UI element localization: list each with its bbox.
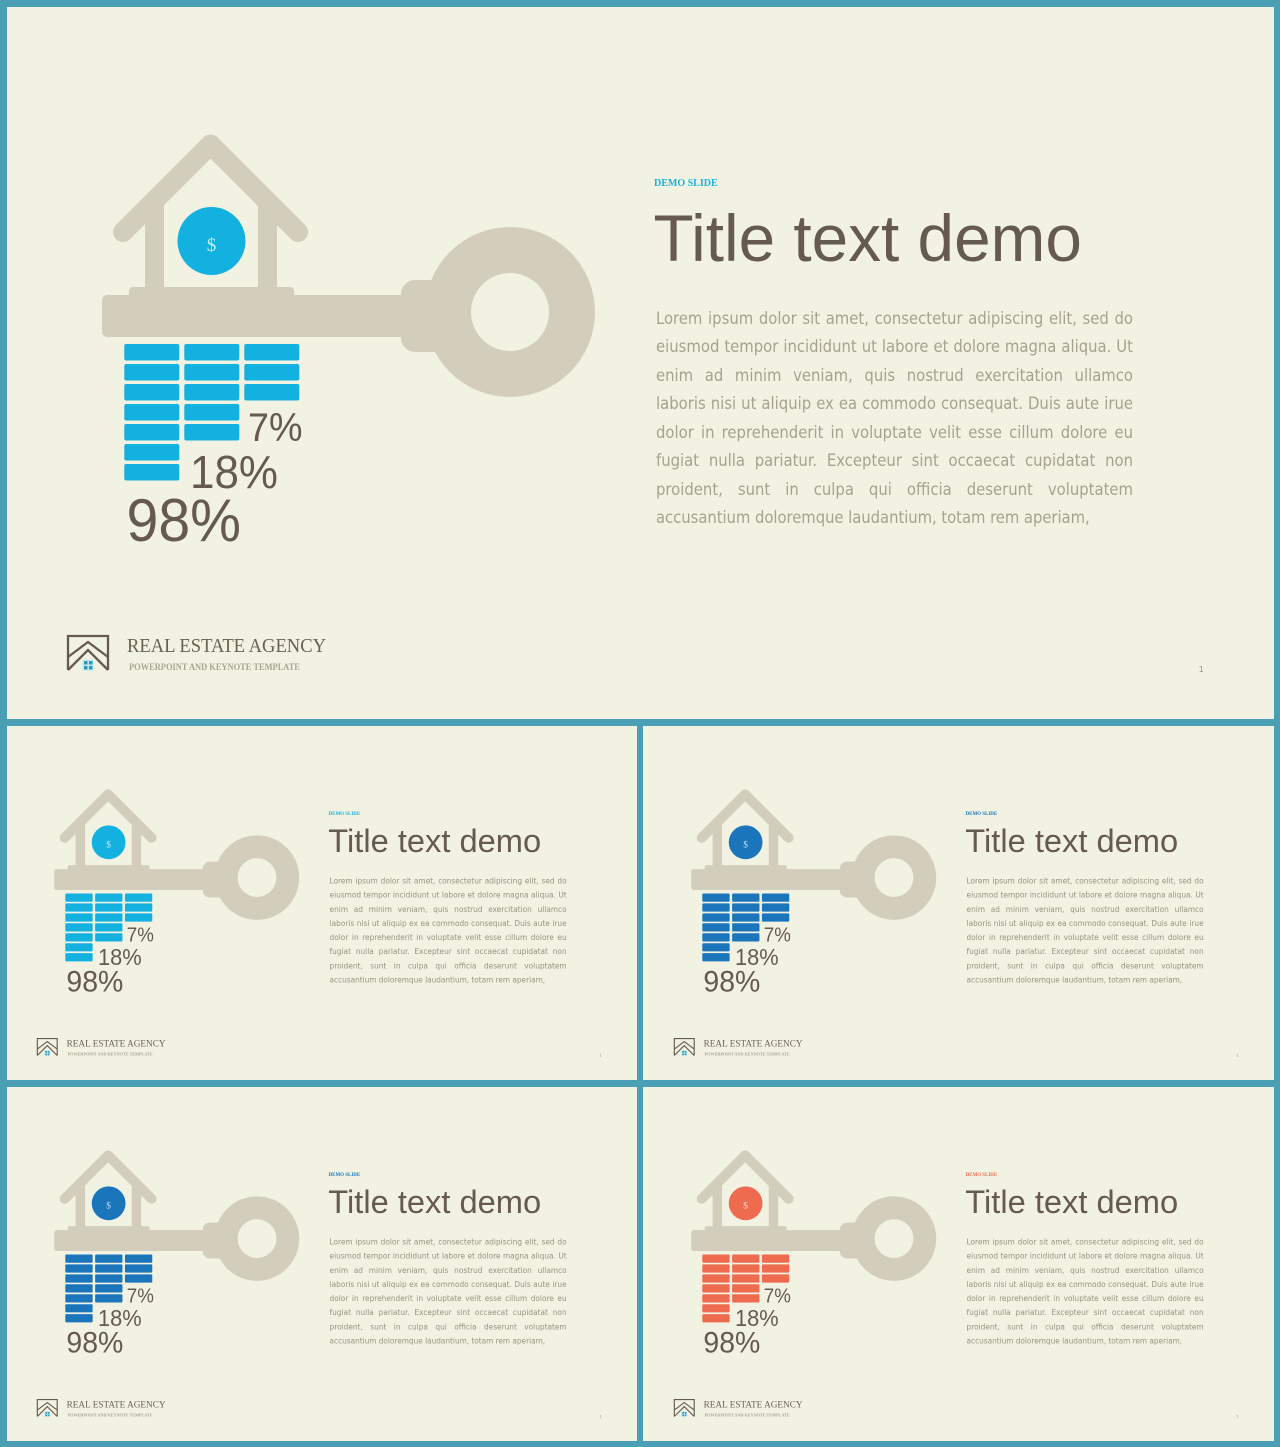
brand subtitle: POWERPOINT AND KEYNOTE TEMPLATE bbox=[68, 1052, 153, 1057]
body text: dolor in reprehenderit in voluptate velit esse cillum dolore eu bbox=[966, 933, 1203, 942]
body text: enim ad minim veniam, quis nostrud exercitation ullamco bbox=[330, 1265, 567, 1275]
body text: accusantium doloremque laudantium, totam rem aperiam, bbox=[330, 975, 545, 984]
label: 18%: 18% bbox=[98, 944, 142, 970]
label: 18%: 18% bbox=[734, 1305, 778, 1331]
label: 98%: 98% bbox=[66, 1326, 123, 1359]
icon: key bbox=[102, 227, 595, 397]
icon: key bbox=[691, 1196, 936, 1281]
icon: dollar coin bbox=[92, 825, 126, 859]
body text: eiusmod tempor incididunt ut labore et dolore magna aliqua. Ut bbox=[656, 337, 1133, 356]
panel: small slide orange bbox=[643, 1087, 1274, 1441]
body text: Lorem ipsum dolor sit amet, consectetur adipiscing elit, sed do bbox=[656, 308, 1133, 328]
body text: Lorem ipsum dolor sit amet, consectetur adipiscing elit, sed do bbox=[330, 876, 567, 885]
body text: fugiat nulla pariatur. Excepteur sint occaecat cupidatat non bbox=[966, 1308, 1203, 1317]
icon: dollar coin bbox=[728, 1186, 762, 1220]
body text: eiusmod tempor incididunt ut labore et dolore magna aliqua. Ut bbox=[966, 890, 1203, 899]
brick bar chart bbox=[65, 893, 152, 961]
icon: agency logo bbox=[674, 1039, 694, 1056]
label: 18%: 18% bbox=[98, 1305, 142, 1331]
tag: demo slide: DEMO SLIDE bbox=[965, 812, 997, 817]
page number: 1 bbox=[1199, 665, 1204, 674]
body text: dolor in reprehenderit in voluptate velit esse cillum dolore eu bbox=[656, 422, 1133, 442]
brand subtitle: POWERPOINT AND KEYNOTE TEMPLATE bbox=[68, 1413, 153, 1418]
panel: small slide dark blue, top right bbox=[643, 726, 1274, 1080]
icon: dollar coin: $ bbox=[207, 235, 216, 256]
illustration and headings bbox=[36, 1150, 602, 1419]
brand subtitle: POWERPOINT AND KEYNOTE TEMPLATE bbox=[129, 663, 300, 673]
brand subtitle: POWERPOINT AND KEYNOTE TEMPLATE bbox=[704, 1413, 789, 1418]
body text: eiusmod tempor incididunt ut labore et dolore magna aliqua. Ut bbox=[966, 1251, 1203, 1260]
label: 18%: 18% bbox=[734, 944, 778, 970]
body text: enim ad minim veniam, quis nostrud exercitation ullamco bbox=[966, 1265, 1203, 1275]
page number: 1 bbox=[599, 1414, 602, 1419]
body text: laboris nisi ut aliquip ex ea commodo consequat. Duis aute irue bbox=[330, 1279, 567, 1289]
icon: agency logo bbox=[37, 1400, 57, 1417]
body text: laboris nisi ut aliquip ex ea commodo consequat. Duis aute irue bbox=[656, 394, 1133, 413]
body text: dolor in reprehenderit in voluptate velit esse cillum dolore eu bbox=[966, 1294, 1203, 1303]
icon: dollar coin bbox=[178, 207, 246, 275]
body text: dolor in reprehenderit in voluptate velit esse cillum dolore eu bbox=[330, 1294, 567, 1303]
title: Title text demo bbox=[965, 822, 1178, 859]
panel: small slide cyan bbox=[7, 726, 637, 1080]
body text: Lorem ipsum dolor sit amet, consectetur adipiscing elit, sed do bbox=[330, 1237, 567, 1246]
tag: demo slide: DEMO SLIDE bbox=[654, 178, 718, 189]
body text: enim ad minim veniam, quis nostrud exercitation ullamco bbox=[656, 366, 1133, 384]
body text bbox=[330, 876, 567, 984]
label: 98%: 98% bbox=[703, 1326, 760, 1359]
body text: laboris nisi ut aliquip ex ea commodo consequat. Duis aute irue bbox=[330, 918, 567, 928]
label: 18%: 18% bbox=[190, 446, 278, 498]
icon: agency logo bbox=[68, 636, 108, 670]
title: Title text demo bbox=[654, 202, 1082, 275]
brand name: REAL ESTATE AGENCY bbox=[703, 1400, 802, 1411]
label: 7%: 7% bbox=[763, 1286, 790, 1308]
body text: proident, sunt in culpa qui officia deserunt voluptatem bbox=[966, 1322, 1203, 1331]
panel: small slide dark blue, bottom left bbox=[7, 1087, 637, 1441]
icon: house bbox=[65, 1155, 152, 1233]
body text: enim ad minim veniam, quis nostrud exercitation ullamco bbox=[330, 904, 567, 914]
illustration and headings bbox=[674, 1150, 1239, 1419]
panel: main slide bbox=[7, 7, 1274, 719]
brand name: REAL ESTATE AGENCY bbox=[127, 636, 326, 657]
brick bar chart bbox=[124, 344, 299, 480]
body text: accusantium doloremque laudantium, totam rem aperiam, bbox=[966, 975, 1182, 984]
icon: agency logo bbox=[674, 1400, 694, 1417]
body text: Lorem ipsum dolor sit amet, consectetur adipiscing elit, sed do bbox=[966, 1237, 1203, 1246]
icon: house bbox=[701, 1155, 788, 1233]
body text: fugiat nulla pariatur. Excepteur sint occaecat cupidatat non bbox=[966, 947, 1203, 956]
icon: key bbox=[54, 835, 299, 920]
body text: laboris nisi ut aliquip ex ea commodo consequat. Duis aute irue bbox=[966, 1279, 1203, 1289]
body text bbox=[966, 1237, 1204, 1345]
title: Title text demo bbox=[328, 1183, 541, 1220]
body text: enim ad minim veniam, quis nostrud exercitation ullamco bbox=[966, 904, 1203, 914]
label: 7%: 7% bbox=[248, 406, 302, 450]
title: Title text demo bbox=[965, 1183, 1178, 1220]
body text: fugiat nulla pariatur. Excepteur sint occaecat cupidatat non bbox=[330, 947, 567, 956]
icon: agency logo bbox=[37, 1039, 57, 1056]
tag: demo slide: DEMO SLIDE bbox=[329, 1173, 361, 1178]
brand name: REAL ESTATE AGENCY bbox=[67, 1039, 166, 1050]
body text: fugiat nulla pariatur. Excepteur sint occaecat cupidatat non bbox=[656, 451, 1133, 470]
label: 7%: 7% bbox=[127, 1286, 154, 1308]
body text: accusantium doloremque laudantium, totam rem aperiam, bbox=[656, 508, 1090, 527]
label: 98%: 98% bbox=[66, 965, 123, 998]
body text: proident, sunt in culpa qui officia deserunt voluptatem bbox=[656, 480, 1133, 498]
body text: Lorem ipsum dolor sit amet, consectetur adipiscing elit, sed do bbox=[966, 876, 1203, 885]
icon: key bbox=[54, 1196, 299, 1281]
body text bbox=[330, 1237, 567, 1345]
icon: dollar coin bbox=[728, 825, 762, 859]
body text bbox=[966, 876, 1204, 984]
brand name: REAL ESTATE AGENCY bbox=[67, 1400, 166, 1411]
icon: dollar coin: $ bbox=[743, 839, 748, 850]
body text: accusantium doloremque laudantium, totam rem aperiam, bbox=[330, 1336, 545, 1345]
label: 7%: 7% bbox=[127, 925, 154, 947]
brick bar chart bbox=[702, 1254, 789, 1322]
brick bar chart bbox=[65, 1254, 152, 1322]
brick bar chart bbox=[702, 893, 789, 961]
label: 98%: 98% bbox=[126, 487, 241, 554]
icon: house bbox=[65, 794, 152, 872]
icon: house bbox=[701, 794, 788, 872]
body text: proident, sunt in culpa qui officia deserunt voluptatem bbox=[330, 961, 567, 970]
page number: 1 bbox=[1236, 1414, 1239, 1419]
icon: key bbox=[691, 835, 936, 920]
title: Title text demo bbox=[328, 822, 541, 859]
icon: dollar coin bbox=[92, 1186, 126, 1220]
brand name: REAL ESTATE AGENCY bbox=[703, 1039, 802, 1050]
icon: dollar coin: $ bbox=[743, 1200, 748, 1211]
label: 98%: 98% bbox=[703, 965, 760, 998]
body text: dolor in reprehenderit in voluptate velit esse cillum dolore eu bbox=[330, 933, 567, 942]
page number: 1 bbox=[599, 1053, 602, 1058]
icon: house bbox=[123, 144, 298, 301]
body text: laboris nisi ut aliquip ex ea commodo consequat. Duis aute irue bbox=[966, 918, 1203, 928]
body text bbox=[656, 308, 1133, 527]
body text: eiusmod tempor incididunt ut labore et dolore magna aliqua. Ut bbox=[330, 890, 567, 899]
body text: proident, sunt in culpa qui officia deserunt voluptatem bbox=[330, 1322, 567, 1331]
body text: proident, sunt in culpa qui officia deserunt voluptatem bbox=[966, 961, 1203, 970]
illustration and headings bbox=[36, 789, 602, 1058]
brand subtitle: POWERPOINT AND KEYNOTE TEMPLATE bbox=[704, 1052, 789, 1057]
illustration and headings bbox=[674, 789, 1239, 1058]
icon: dollar coin: $ bbox=[106, 839, 111, 850]
page number: 1 bbox=[1236, 1053, 1239, 1058]
body text: fugiat nulla pariatur. Excepteur sint occaecat cupidatat non bbox=[330, 1308, 567, 1317]
body text: eiusmod tempor incididunt ut labore et dolore magna aliqua. Ut bbox=[330, 1251, 567, 1260]
label: 7%: 7% bbox=[763, 925, 790, 947]
body text: accusantium doloremque laudantium, totam rem aperiam, bbox=[966, 1336, 1182, 1345]
tag: demo slide: DEMO SLIDE bbox=[329, 812, 361, 817]
illustration and headings bbox=[66, 134, 1204, 674]
tag: demo slide: DEMO SLIDE bbox=[965, 1173, 997, 1178]
icon: dollar coin: $ bbox=[106, 1200, 111, 1211]
